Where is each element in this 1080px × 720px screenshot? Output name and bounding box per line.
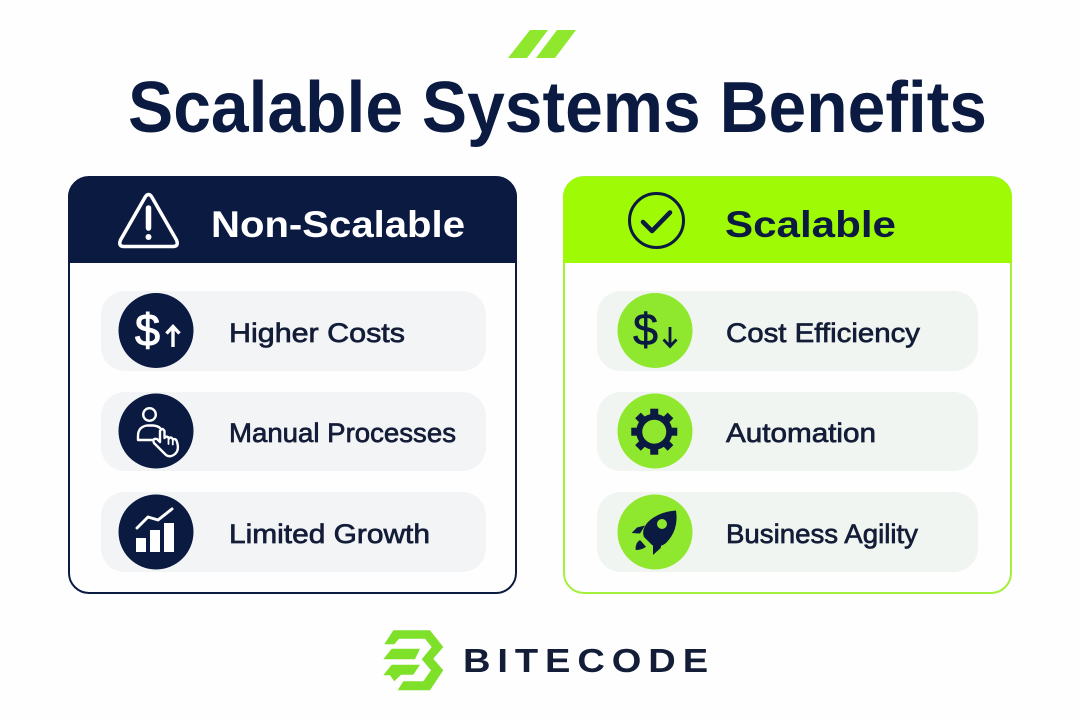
panel: non-scalable — [68, 177, 517, 593]
row: Business Agility — [597, 492, 978, 572]
heading: Scalable: Scalable — [725, 204, 896, 245]
row: Automation — [597, 392, 978, 471]
heading: Non-Scalable: Non-Scalable — [211, 204, 465, 245]
logo: Bitecode — [383, 630, 715, 690]
row: Limited Growth — [101, 492, 486, 572]
icon: dollar down: $ — [633, 304, 658, 355]
icon: bar chart with trend line — [118, 494, 194, 570]
title: Scalable Systems Benefits — [128, 68, 987, 148]
decorative accent: green slashes — [508, 30, 576, 58]
row: Cost Efficiency — [597, 291, 978, 371]
icon: gear — [618, 394, 692, 468]
label: Higher Costs — [229, 318, 405, 348]
label: Limited Growth — [229, 519, 430, 549]
row: Higher Costs — [101, 291, 486, 371]
panel: scalable — [563, 177, 1012, 593]
panel header: scalable — [563, 177, 1012, 263]
icon: rocket — [618, 494, 692, 570]
label: Business Agility — [726, 519, 919, 549]
panel header: non-scalable — [68, 177, 517, 263]
icon: check circle — [630, 194, 684, 248]
row: Manual Processes — [101, 392, 486, 471]
icon: dollar up: $ — [135, 304, 160, 356]
label: Cost Efficiency — [726, 318, 921, 348]
icon: warning triangle — [120, 194, 177, 246]
label: Automation — [726, 418, 876, 448]
icon: dollar up — [118, 293, 194, 368]
logo mark — [383, 630, 443, 690]
wordmark: BITECODE — [463, 642, 715, 679]
label: Manual Processes — [229, 418, 456, 448]
icon: dollar down — [618, 293, 692, 368]
icon: person with pointing hand — [118, 394, 194, 468]
